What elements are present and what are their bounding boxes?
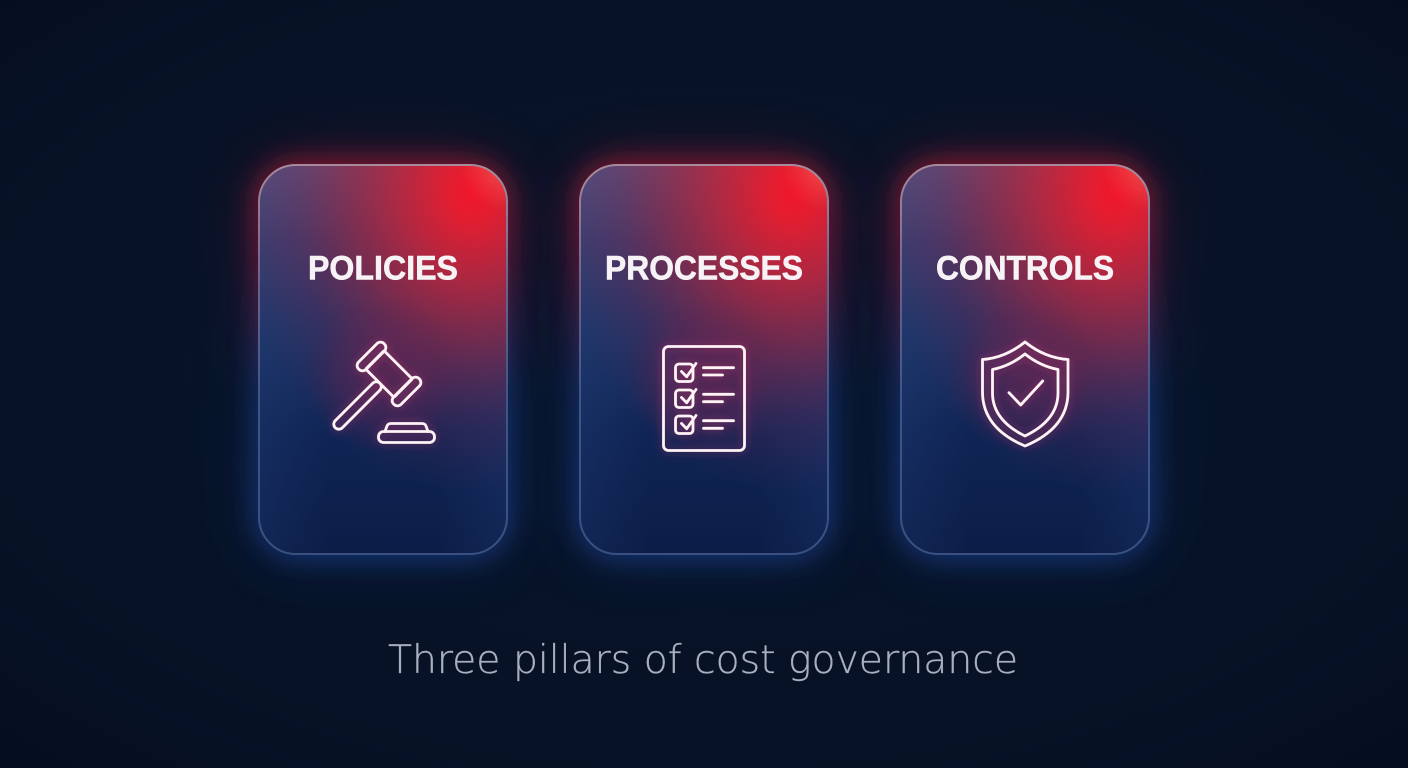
icon: shield bbox=[982, 342, 1068, 446]
heading: controls: CONTROLS bbox=[936, 250, 1114, 288]
panel: processes bbox=[579, 164, 829, 555]
icon: checklist bbox=[664, 346, 744, 450]
panel: controls bbox=[900, 164, 1150, 555]
heading: processes: PROCESSES bbox=[605, 250, 803, 288]
caption: Three pillars of cost governance bbox=[388, 638, 1018, 683]
icon: gavel bbox=[314, 340, 434, 449]
heading: policies: POLICIES bbox=[308, 250, 458, 288]
panel: policies bbox=[258, 164, 508, 555]
